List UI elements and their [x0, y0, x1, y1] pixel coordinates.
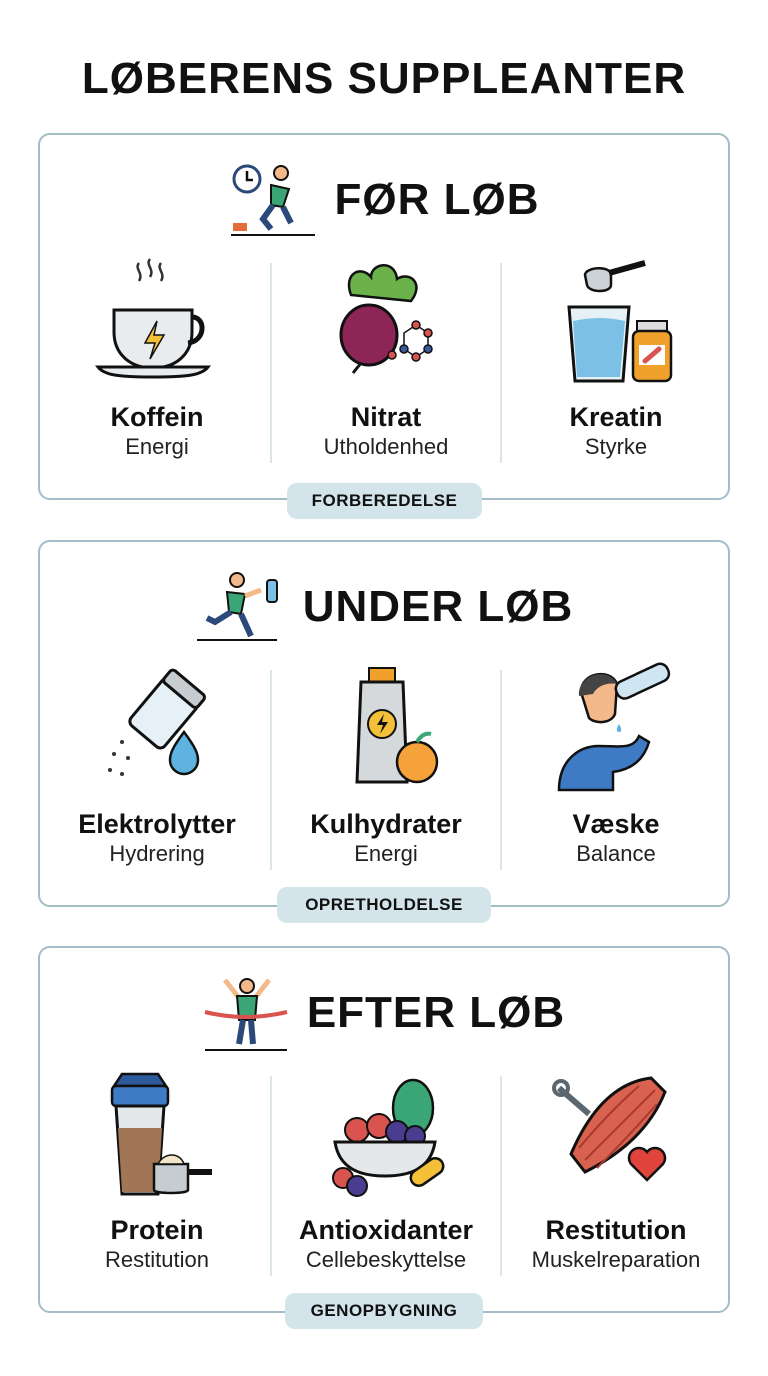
column: koffein: Koffein: [110, 402, 203, 432]
heading: under løb: UNDER LØB: [303, 582, 573, 631]
column: nitrat: Utholdenhed: [324, 434, 448, 459]
panel: før løb: [38, 133, 730, 500]
title: LØBERENS SUPPLEANTER: [82, 54, 686, 103]
column: restitution: Restitution: [546, 1215, 686, 1245]
heading: før løb: FØR LØB: [334, 175, 539, 224]
icon: salt shaker and drop: [108, 668, 206, 776]
column: elektrolytter: Elektrolytter: [78, 809, 236, 839]
icon: fruit bowl and capsule: [332, 1078, 444, 1197]
column: væske: [558, 662, 670, 866]
heading: før løb: [231, 164, 539, 236]
column: antioxidanter: Antioxidanter: [299, 1215, 473, 1245]
column: antioxidanter: [299, 1078, 473, 1272]
panel: under løb: [38, 540, 730, 907]
column: kulhydrater: Kulhydrater: [310, 809, 462, 839]
column: kreatin: Kreatin: [569, 402, 663, 432]
panel: efter løb: [38, 946, 730, 1313]
icon: beetroot: [340, 264, 433, 374]
icon: runner with bottle: [197, 572, 278, 641]
icon: muscle wrench heart: [552, 1076, 667, 1182]
tag: opretholdelse: [277, 887, 491, 923]
column: restitution: [532, 1076, 700, 1272]
column: nitrat: Nitrat: [351, 402, 421, 432]
icon: finisher at tape: [204, 978, 288, 1051]
icon: runner with clock: [231, 164, 315, 236]
notch: [363, 945, 365, 947]
column: kulhydrater: [310, 667, 462, 866]
notch: [363, 539, 365, 541]
column: restitution: Muskelreparation: [532, 1247, 700, 1272]
tag: opretholdelse: OPRETHOLDELSE: [305, 895, 463, 914]
column: antioxidanter: Cellebeskyttelse: [306, 1247, 466, 1272]
heading: efter løb: EFTER LØB: [307, 988, 565, 1037]
icon: shaker and scoop: [110, 1072, 212, 1196]
column: protein: [105, 1072, 212, 1272]
column: elektrolytter: Hydrering: [109, 841, 205, 866]
column: væske: Væske: [572, 809, 660, 839]
tag: forberedelse: [287, 483, 482, 519]
icon: coffee cup: [95, 258, 211, 378]
column: kreatin: Styrke: [585, 434, 647, 459]
column: elektrolytter: [78, 668, 236, 866]
icon: person drinking: [558, 662, 670, 792]
column: protein: Protein: [110, 1215, 204, 1245]
heading: efter løb: [204, 978, 565, 1051]
column: koffein: [95, 258, 211, 459]
column: kreatin: [567, 260, 672, 459]
tag: genopbygning: GENOPBYGNING: [311, 1301, 457, 1320]
icon: glass scoop bottle: [567, 260, 672, 382]
tag: forberedelse: FORBEREDELSE: [312, 491, 457, 510]
icon: gel and fruit: [355, 667, 438, 784]
column: nitrat: [324, 264, 448, 459]
column: kulhydrater: Energi: [354, 841, 418, 866]
column: koffein: Energi: [125, 434, 189, 459]
heading: under løb: [197, 572, 573, 641]
tag: genopbygning: [285, 1293, 483, 1329]
column: protein: Restitution: [105, 1247, 209, 1272]
column: væske: Balance: [576, 841, 656, 866]
